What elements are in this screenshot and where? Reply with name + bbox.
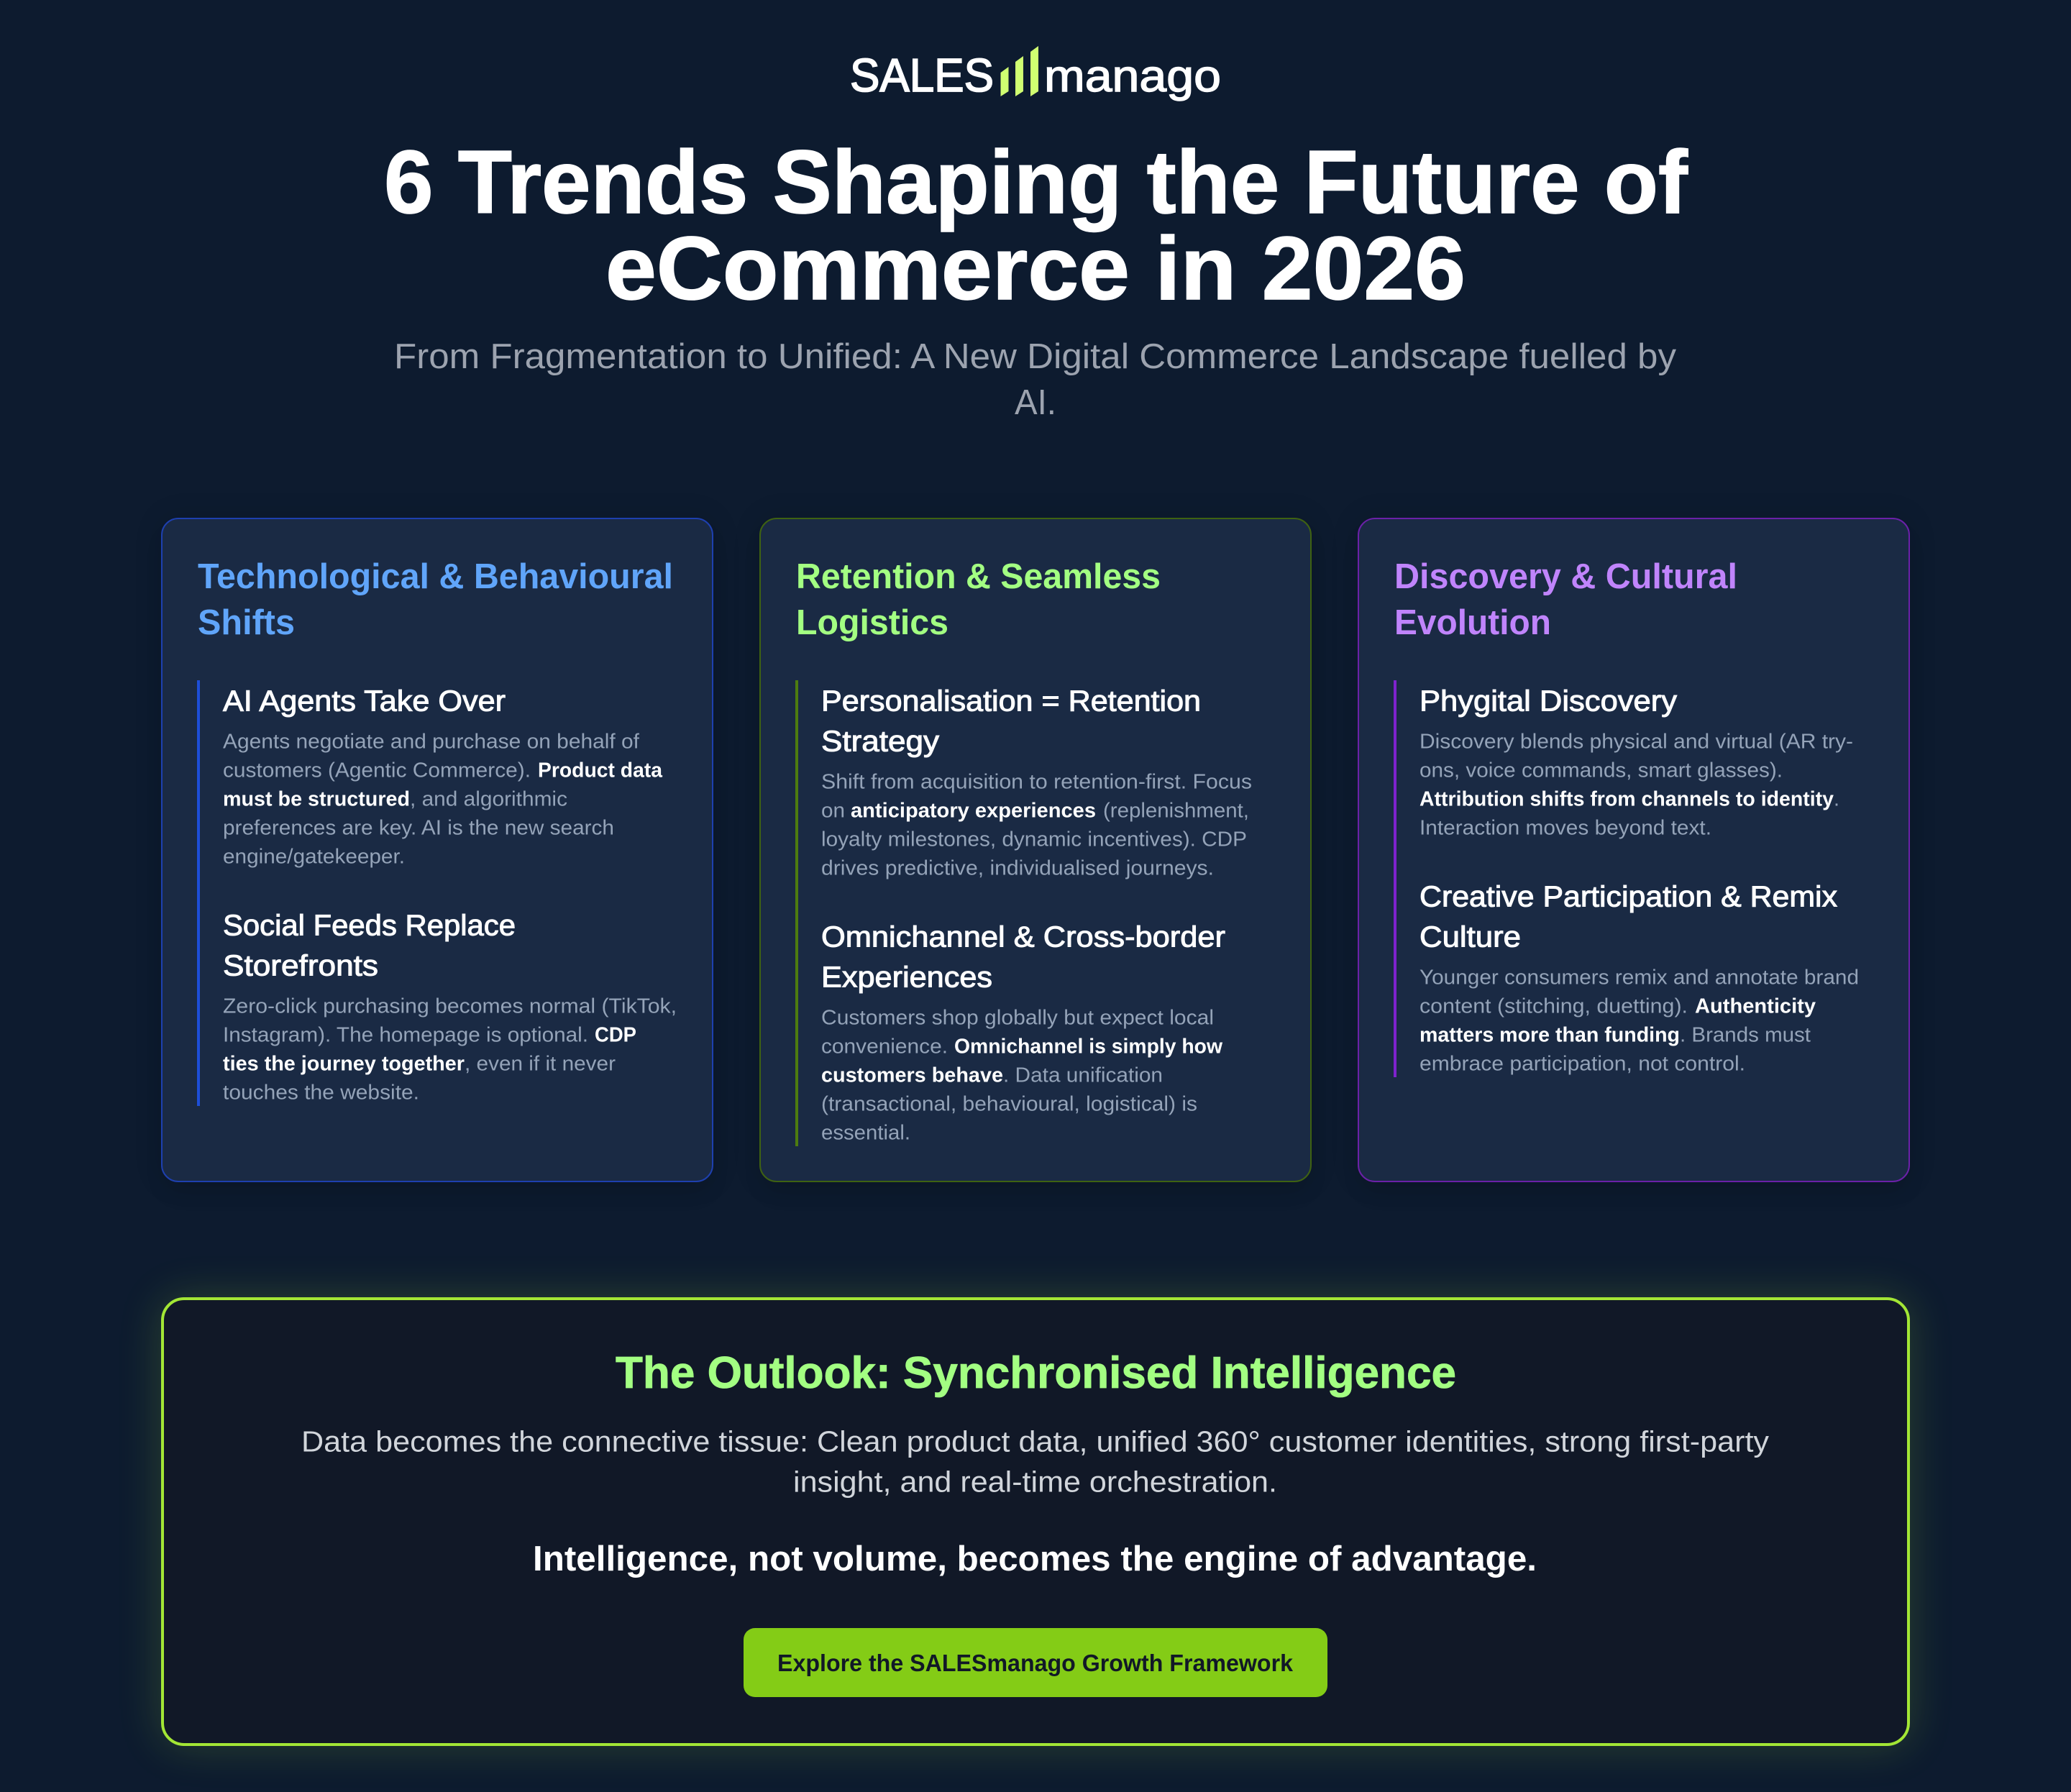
item: Omnichannel & Cross-border Experiences: Customers shop globally but expect local (821, 1007, 1214, 1030)
item: AI Agents Take Over (223, 685, 663, 869)
item: Creative Participation & Remix Culture: Creative Participation & Remix (1419, 880, 1838, 913)
item: Phygital Discovery: Phygital Discovery (1419, 685, 1678, 718)
item: Personalisation = Retention Strategy: loyalty milestones, dynamic incentives). CDP (821, 828, 1247, 851)
item: Personalisation = Retention Strategy: Strategy (821, 725, 940, 758)
item: Social Feeds Replace Storefronts: ties the journey together (223, 1053, 465, 1076)
item: AI Agents Take Over: engine/gatekeeper. (223, 846, 405, 869)
button: Explore the SALESmanago Growth Framework (744, 1628, 1327, 1697)
heading: Retention & Seamless Logistics: Retention & Seamless (796, 557, 1161, 596)
logo: SALESmanago: manago (1044, 52, 1221, 101)
heading: Technological & Behavioural Shifts: Technological & Behavioural (198, 557, 673, 596)
item: Creative Participation & Remix Culture (1419, 880, 1859, 1076)
icon: rising bars (1001, 46, 1038, 96)
item: Phygital Discovery: . (1834, 788, 1839, 811)
title: eCommerce in 2026 (605, 219, 1466, 319)
title: 6 Trends Shaping the Future of (384, 133, 1688, 232)
outlook description: Data becomes the connective tissue: Clean product data, unified 360° customer identities, strong first-party (301, 1425, 1770, 1458)
item: Omnichannel & Cross-border Experiences: Omnichannel is simply how (954, 1036, 1222, 1059)
item: Omnichannel & Cross-border Experiences: customers behave (821, 1064, 1003, 1087)
item: Personalisation = Retention Strategy (821, 685, 1252, 880)
heading: Retention & Seamless Logistics: Logistics (796, 603, 948, 642)
panel: The Outlook (161, 1297, 1910, 1746)
item: Personalisation = Retention Strategy: Shift from acquisition to retention-first. Focus (821, 771, 1252, 794)
item: Social Feeds Replace Storefronts: touches the website. (223, 1082, 419, 1105)
item: Social Feeds Replace Storefronts: Instagram). The homepage is optional. (223, 1024, 588, 1047)
item: Social Feeds Replace Storefronts (223, 909, 677, 1105)
subtitle: From Fragmentation to Unified: A New Digital Commerce Landscape fuelled by (394, 337, 1677, 376)
panel: Technological & Behavioural Shifts (161, 518, 713, 1182)
item: Personalisation = Retention Strategy: drives predictive, individualised journeys. (821, 857, 1214, 880)
title (384, 133, 1688, 319)
item: AI Agents Take Over: must be structured (223, 788, 410, 811)
item: Social Feeds Replace Storefronts: Storefronts (223, 949, 378, 982)
button: Explore the SALESmanago Growth Framework: Explore the SALESmanago Growth Framework (777, 1650, 1294, 1676)
item: Social Feeds Replace Storefronts: Zero-click purchasing becomes normal (TikTok, (223, 995, 677, 1018)
heading: Technological & Behavioural Shifts: Shifts (198, 603, 295, 642)
item: AI Agents Take Over: customers (Agentic Commerce). (223, 759, 531, 782)
item: Social Feeds Replace Storefronts: Social Feeds Replace (223, 909, 516, 942)
item: Creative Participation & Remix Culture: content (stitching, duetting). (1419, 995, 1688, 1018)
logo: SALESmanago: SALES (850, 49, 994, 101)
item: Creative Participation & Remix Culture: . Brands must (1680, 1024, 1811, 1047)
item: Creative Participation & Remix Culture: embrace participation, not control. (1419, 1053, 1745, 1076)
panel: Discovery & Cultural Evolution (1358, 518, 1910, 1182)
item: Omnichannel & Cross-border Experiences: (transactional, behavioural, logistical) is (821, 1093, 1197, 1116)
subtitle (394, 337, 1677, 422)
key statement: Intelligence, not volume, becomes the engine of advantage. (533, 1540, 1537, 1578)
heading: Discovery & Cultural Evolution: Evolution (1394, 603, 1551, 642)
item: Omnichannel & Cross-border Experiences: Experiences (821, 961, 992, 994)
accent bar (795, 680, 798, 1146)
heading: Discovery & Cultural Evolution: Discovery & Cultural (1394, 557, 1737, 596)
item: Social Feeds Replace Storefronts: CDP (595, 1024, 636, 1047)
heading: Retention & Seamless Logistics (796, 557, 1161, 642)
heading: Discovery & Cultural Evolution (1394, 557, 1737, 642)
item: Phygital Discovery: Attribution shifts from channels to identity (1419, 788, 1834, 811)
item: AI Agents Take Over: AI Agents Take Over (223, 685, 506, 718)
accent bar (1394, 680, 1396, 1077)
outlook description (301, 1425, 1770, 1499)
item: Creative Participation & Remix Culture: Authenticity (1695, 995, 1816, 1018)
item: Omnichannel & Cross-border Experiences: Omnichannel & Cross-border (821, 920, 1225, 954)
panel: Retention & Seamless Logistics (759, 518, 1312, 1182)
item: Personalisation = Retention Strategy: (replenishment, (1103, 800, 1249, 823)
item: Omnichannel & Cross-border Experiences (821, 920, 1225, 1145)
item: Phygital Discovery: Interaction moves beyond text. (1419, 817, 1711, 840)
heading: The Outlook: The Outlook: Synchronised Intelligence (616, 1348, 1456, 1398)
item: AI Agents Take Over: Product data (538, 759, 663, 782)
item: Omnichannel & Cross-border Experiences: . Data unification (1003, 1064, 1163, 1087)
logo: SALESmanago (850, 46, 1221, 101)
item: Creative Participation & Remix Culture: Younger consumers remix and annotate brand (1419, 966, 1859, 989)
item: Omnichannel & Cross-border Experiences: essential. (821, 1122, 910, 1145)
item: Creative Participation & Remix Culture: matters more than funding (1419, 1024, 1680, 1047)
subtitle: AI. (1015, 383, 1056, 422)
outlook description: insight, and real-time orchestration. (793, 1466, 1277, 1499)
header: logo, title and subtitle (384, 46, 1688, 422)
item: AI Agents Take Over: , and algorithmic (410, 788, 567, 811)
item: Phygital Discovery (1419, 685, 1853, 840)
item: AI Agents Take Over: preferences are key. AI is the new search (223, 817, 614, 840)
heading: Technological & Behavioural Shifts (198, 557, 673, 642)
item: AI Agents Take Over: Agents negotiate and purchase on behalf of (223, 731, 640, 754)
item: Omnichannel & Cross-border Experiences: convenience. (821, 1036, 948, 1059)
item: Social Feeds Replace Storefronts: , even if it never (465, 1053, 616, 1076)
item: Creative Participation & Remix Culture: Culture (1419, 920, 1521, 954)
item: Phygital Discovery: Discovery blends physical and virtual (AR try- (1419, 731, 1853, 754)
item: Personalisation = Retention Strategy: Personalisation = Retention (821, 685, 1201, 718)
accent bar (197, 680, 200, 1106)
item: Phygital Discovery: ons, voice commands, smart glasses). (1419, 759, 1783, 782)
item: Personalisation = Retention Strategy: anticipatory experiences (851, 800, 1096, 823)
item: Personalisation = Retention Strategy: on (821, 800, 845, 823)
